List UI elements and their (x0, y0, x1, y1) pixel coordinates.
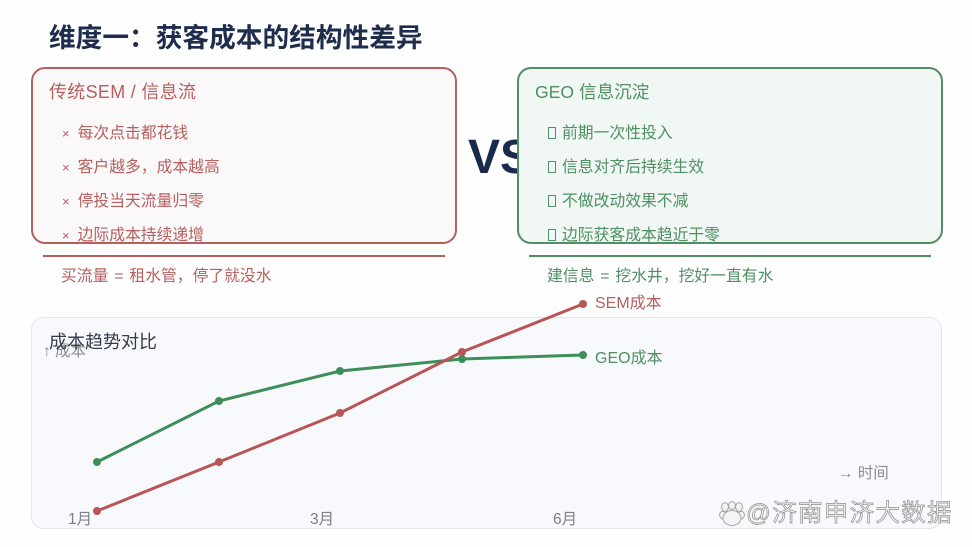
GEO cost line (93, 351, 587, 466)
GEO list item 4: 边际获客成本趋近于零 (562, 227, 720, 244)
GEO list item 2: 信息对齐后持续生效 (562, 159, 704, 176)
divider: GEO (529, 255, 931, 257)
GEO summary: 建信息 = 挖水井，挖好一直有水 (547, 268, 773, 285)
panel: cost trend chart (31, 317, 942, 529)
SEM summary: 买流量 = 租水管，停了就没水 (61, 268, 272, 285)
panel: traditional SEM (31, 67, 457, 244)
icon: paw (719, 501, 745, 526)
panel: GEO (517, 67, 943, 244)
chart heading: 成本趋势对比 (49, 332, 157, 352)
SEM list item 1: × 每次点击都花钱 (62, 125, 188, 142)
SEM list item 3: × 停投当天流量归零 (62, 193, 204, 210)
x axis label: January: 1月 (68, 511, 92, 528)
SEM list item 4: × 边际成本持续递增 (62, 227, 204, 244)
GEO line label: GEO成本 (595, 350, 663, 367)
GEO list item 1: 前期一次性投入 (562, 125, 673, 142)
VS label: VS (468, 131, 532, 184)
watermark (719, 500, 953, 527)
x axis label: June: 6月 (553, 511, 577, 528)
watermark text: @济南申济大数据 (746, 500, 953, 527)
SEM list item 2: × 客户越多，成本越高 (62, 159, 220, 176)
SEM cost line (93, 300, 587, 515)
y axis label: ↑ 成本 (43, 343, 86, 360)
x axis title: → 时间 (838, 465, 889, 482)
SEM line label: SEM成本 (595, 295, 662, 312)
divider: SEM (43, 255, 445, 257)
x axis label: March: 3月 (310, 511, 334, 528)
GEO list item 3: 不做改动效果不减 (562, 193, 688, 210)
panel heading: SEM: 传统SEM / 信息流 (49, 82, 196, 102)
title: 维度一：获客成本的结构性差异 (49, 23, 423, 53)
panel heading: GEO: GEO 信息沉淀 (535, 82, 649, 102)
